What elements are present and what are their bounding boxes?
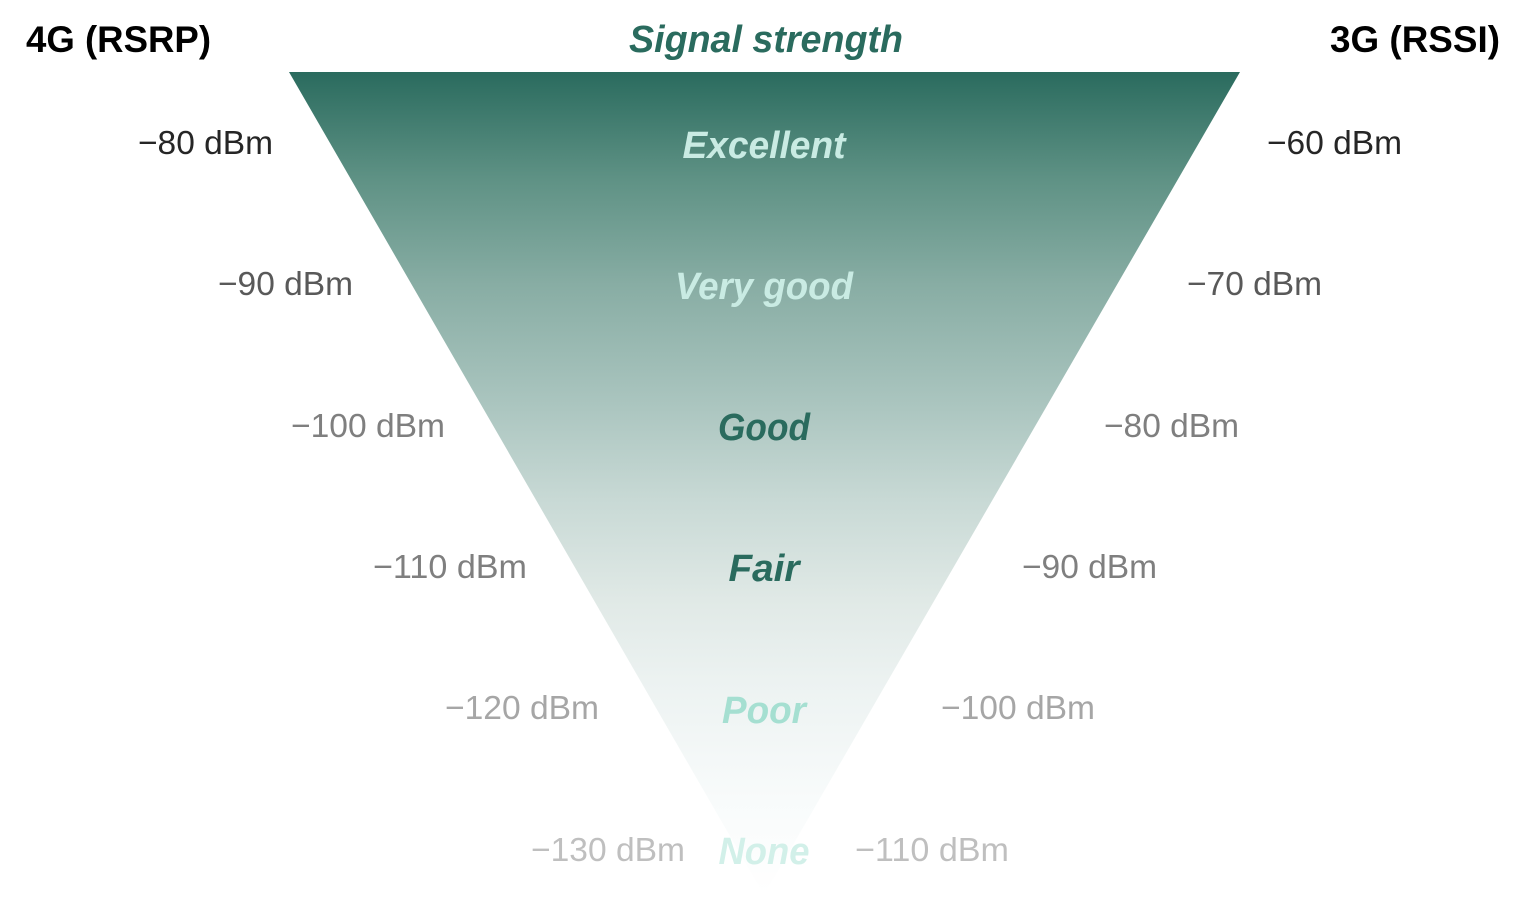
4G dBm scale [138, 125, 685, 869]
value: -130 dBm: −130 dBm [531, 832, 685, 869]
value: -60 dBm: −60 dBm [1267, 125, 1402, 162]
heading: 3G (RSSI): 3G (RSSI) [1330, 19, 1500, 60]
3G dBm scale [855, 125, 1402, 869]
label: Very good: Very good [675, 266, 854, 308]
value: -120 dBm: −120 dBm [445, 690, 599, 727]
value: -80 dBm: −80 dBm [1104, 408, 1239, 445]
value: -90 dBm: −90 dBm [1022, 549, 1157, 586]
value: -80 dBm: −80 dBm [138, 125, 273, 162]
value: -110 dBm: −110 dBm [855, 832, 1009, 869]
heading: 4G (RSRP): 4G (RSRP) [26, 19, 211, 60]
value: -70 dBm: −70 dBm [1187, 266, 1322, 303]
heading: Signal strength: Signal strength [629, 19, 903, 61]
funnel triangle [289, 72, 1240, 895]
label: Fair: Fair [728, 548, 802, 590]
value: -100 dBm: −100 dBm [291, 408, 445, 445]
value: -100 dBm: −100 dBm [941, 690, 1095, 727]
label: Poor: Poor [722, 690, 808, 732]
label: None: None [718, 831, 810, 873]
label: Excellent: Excellent [682, 125, 847, 167]
value: -90 dBm: −90 dBm [218, 266, 353, 303]
quality labels [675, 125, 854, 873]
label: Good: Good [718, 407, 811, 449]
value: -110 dBm: −110 dBm [373, 549, 527, 586]
